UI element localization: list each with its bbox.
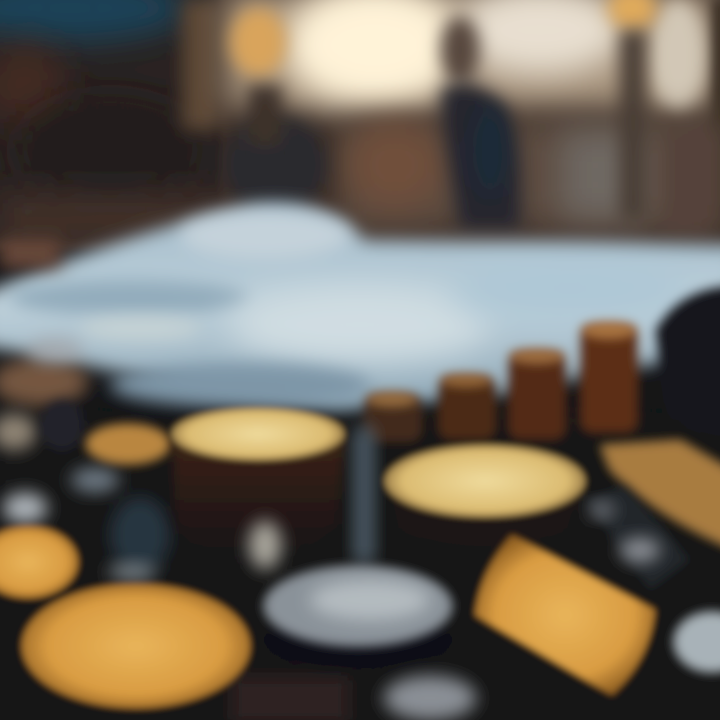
large golden plate, bottom left — [22, 584, 250, 708]
cup: wide crema, centre right — [385, 445, 585, 548]
cup: small golden, left — [86, 424, 170, 464]
golden plate, right edge — [600, 440, 720, 552]
spoon, centre — [249, 425, 374, 569]
dark striped tokens, right — [585, 485, 690, 590]
silver bowl — [262, 566, 454, 668]
silver dish, bottom — [384, 676, 476, 720]
silhouette figure — [440, 16, 521, 230]
golden card — [475, 535, 655, 695]
left stack of cups and coins — [0, 338, 170, 580]
row of small cups, right — [364, 321, 638, 442]
foreground shadow base — [0, 405, 720, 720]
cup: large dark coffee with crema — [172, 408, 345, 561]
dark object, right edge — [655, 285, 720, 440]
golden plate, lower left — [0, 526, 78, 598]
sky glow — [225, 0, 720, 230]
silver dish, bottom right — [674, 612, 720, 672]
distant buildings — [223, 30, 720, 230]
snow field — [0, 203, 720, 415]
